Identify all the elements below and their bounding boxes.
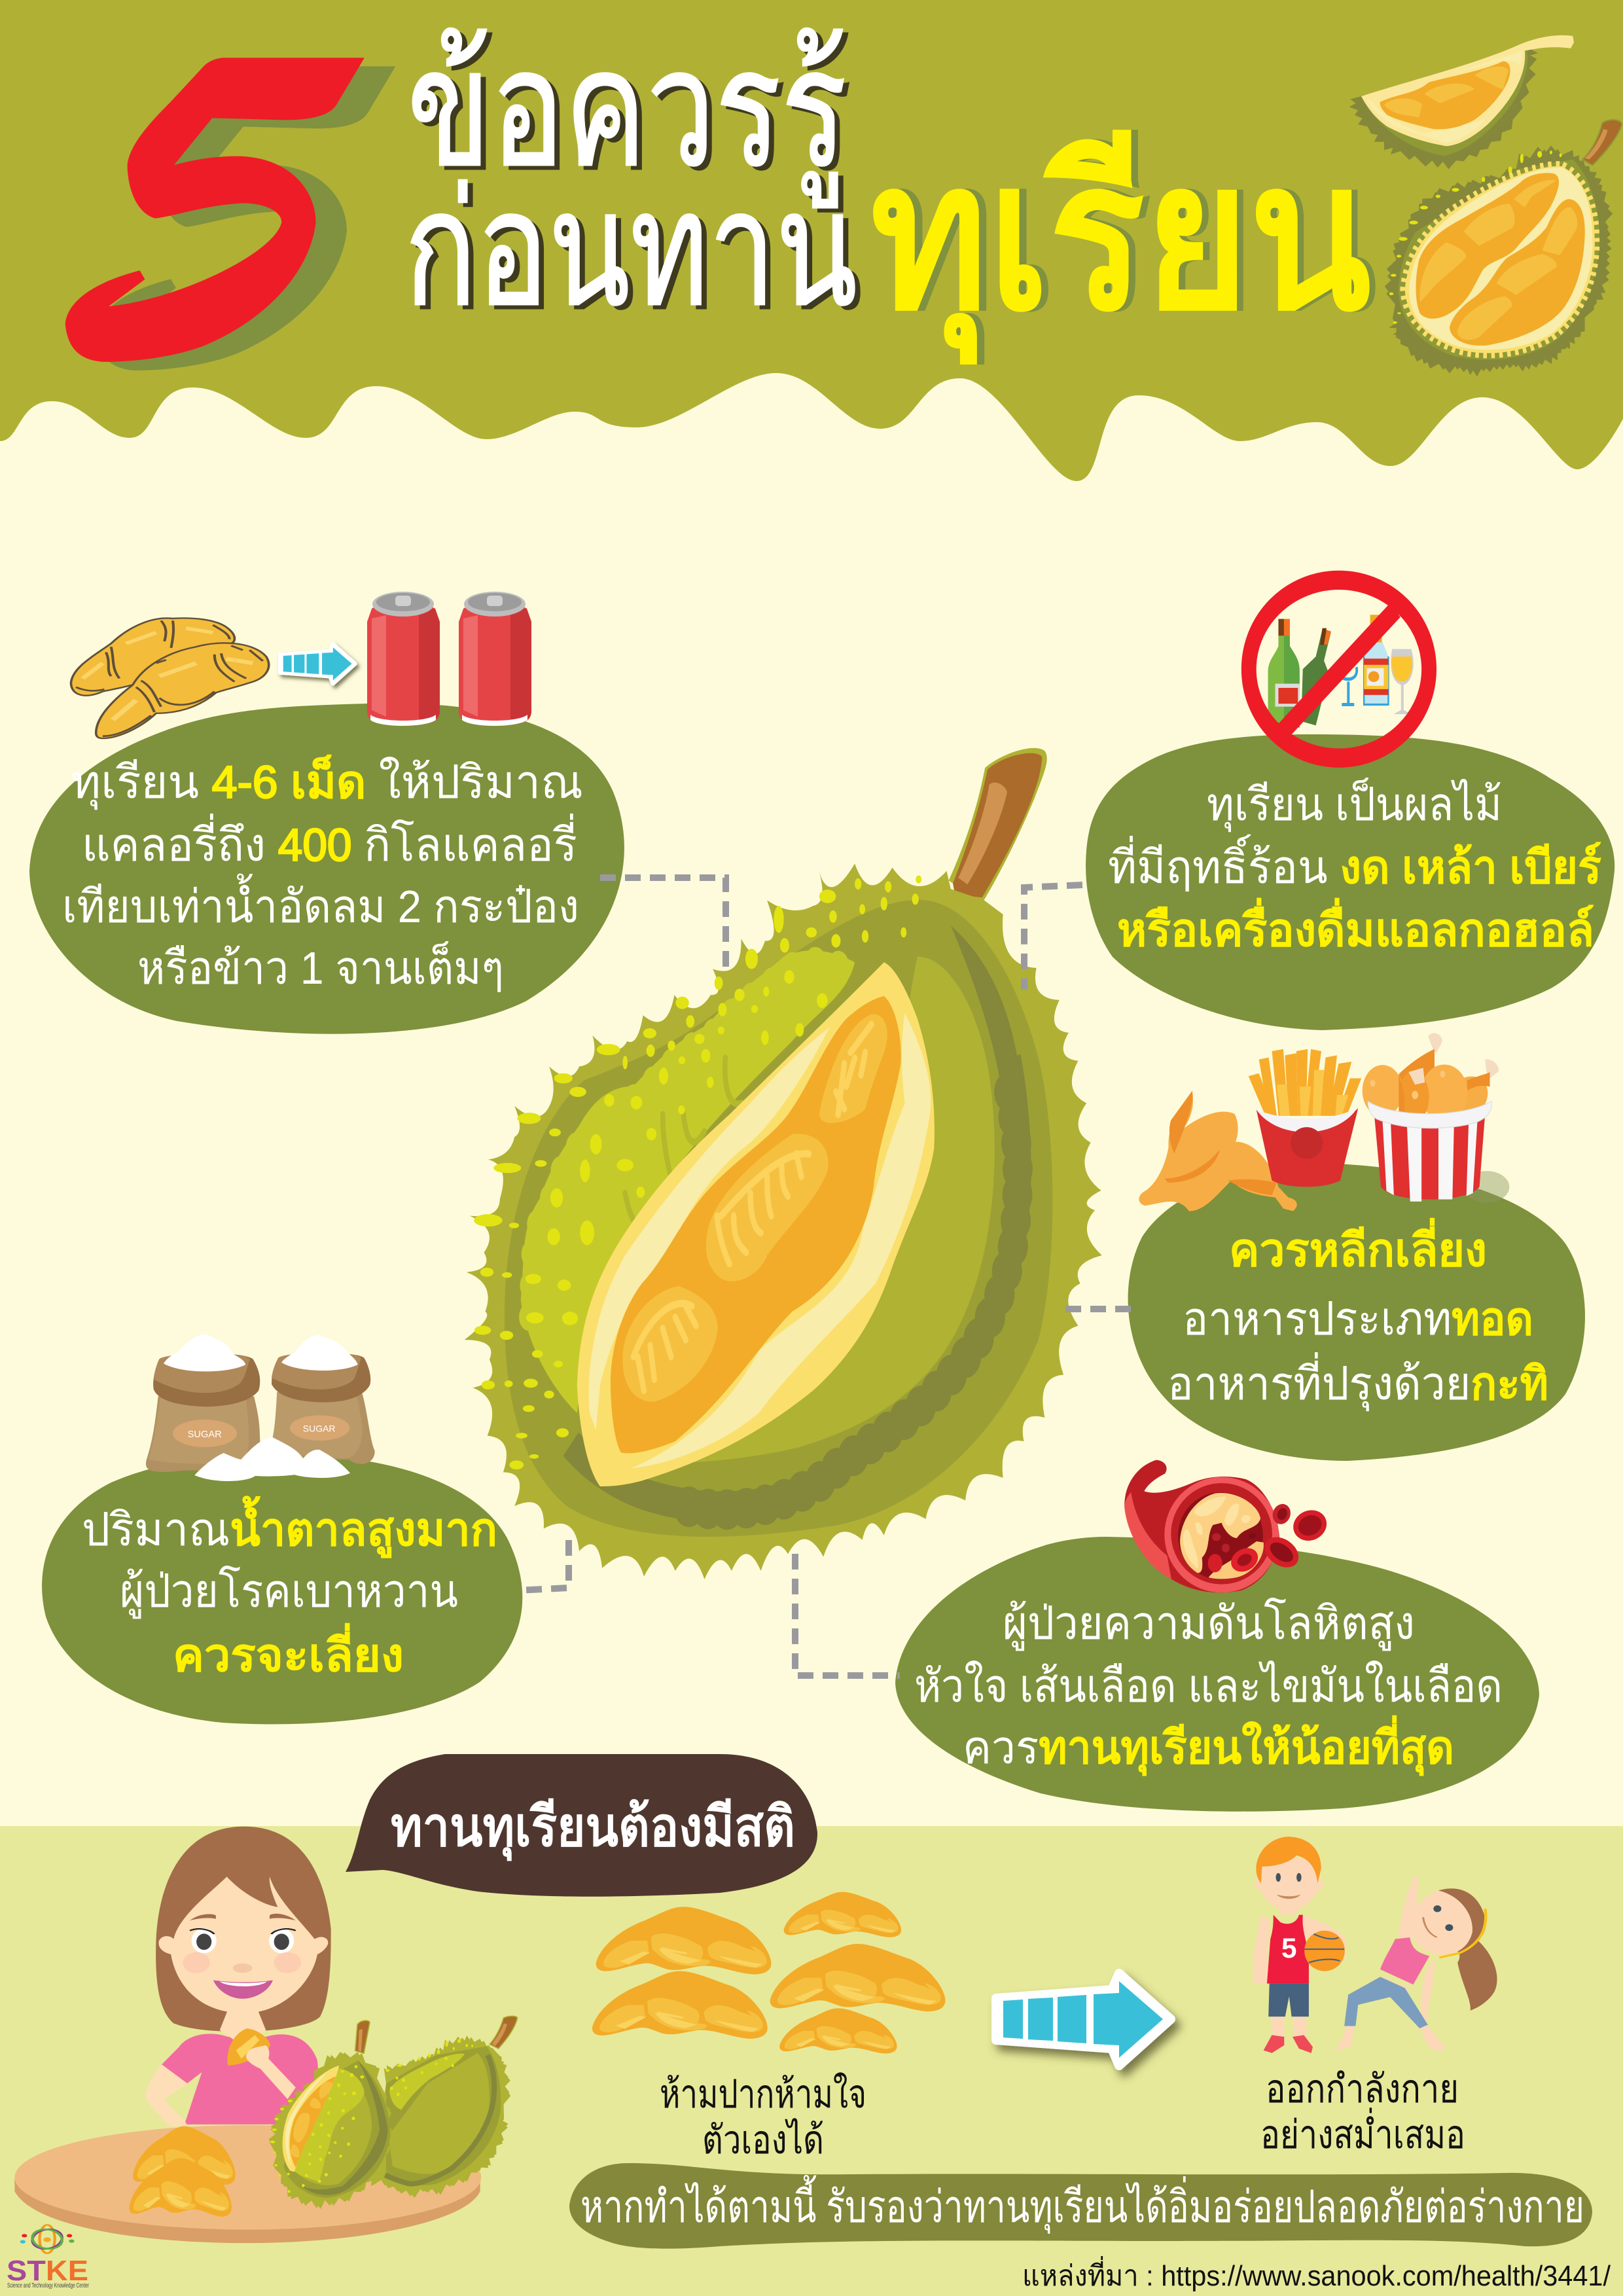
icon: small arrow (280, 644, 355, 684)
brows (190, 1914, 296, 1920)
piece 4 (770, 1944, 945, 2011)
speech bubble (346, 1754, 817, 1897)
arm left (145, 2064, 187, 2126)
sugar pile (194, 1437, 350, 1481)
sack right (272, 1335, 375, 1464)
sack left label: SUGAR (188, 1429, 222, 1440)
speech text: ทานทุเรียนต้องมีสติ (391, 1796, 795, 1861)
panel: avoid fried bubble (1128, 1164, 1585, 1461)
caption: restrain yourself: ตัวเองได้ (702, 2117, 824, 2162)
panel: blood pressure bubble (895, 1537, 1539, 1812)
title line 1: ข้อควรรู้ (407, 17, 847, 208)
sugar text: ผู้ป่วยโรคเบาหวาน (120, 1565, 458, 1619)
header banner with dripping edge (0, 0, 1623, 481)
fries (1249, 1049, 1361, 1116)
main durian illustration (465, 748, 1102, 1579)
shirt (162, 2034, 323, 2125)
yellow speckles (474, 876, 921, 1469)
piece 3 (784, 1892, 901, 1937)
piece 2 (592, 1971, 768, 2039)
sugar text: ควรจะเลี่ยง (173, 1624, 404, 1681)
caption: exercise regularly: อย่างสม่ำเสมอ (1260, 2108, 1465, 2157)
caption: restrain yourself: ห้ามปากห้ามใจ (660, 2072, 866, 2116)
durian pieces on table (129, 2126, 236, 2217)
table (14, 2178, 480, 2243)
blood pressure text: หัวใจ เส้นเลือด และไขมันในเลือด (914, 1660, 1503, 1712)
sack left (146, 1334, 260, 1472)
blood pressure text: ผู้ป่วยความดันโลหิตสูง (1003, 1597, 1415, 1651)
title line 2: ก่อนทาน (410, 163, 863, 342)
arrow to exercise (996, 1973, 1171, 2066)
fried text: อาหารที่ปรุงด้วยกะทิ (1168, 1352, 1548, 1412)
flesh orange core (611, 996, 901, 1453)
logo atom mark (20, 2225, 75, 2253)
girl exercising (1334, 1875, 1497, 2051)
fried wing (1139, 1091, 1297, 1211)
alcohol text: ที่มีฤทธิ์ร้อน งด เหล้า เบียร์ (1108, 834, 1601, 893)
chicken bucket (1374, 1116, 1485, 1200)
title durian word: ทุเรียน (870, 121, 1372, 366)
icon: soda can 2 (459, 592, 531, 726)
piece 5 (779, 2008, 897, 2054)
panel: sugar bubble (42, 1454, 522, 1724)
caption: restrain yourself (660, 2072, 866, 2162)
spiky rind (465, 864, 1102, 1579)
illustration: girl at table (14, 1827, 481, 2243)
icon: sugar sacks (146, 1334, 375, 1481)
title line 2: ก่อนทาน (404, 159, 857, 338)
icon: header durian half (1380, 120, 1622, 384)
fried text (1168, 1219, 1548, 1412)
sack right label: SUGAR (303, 1423, 336, 1433)
title durian word: ทุเรียน (878, 121, 1378, 366)
panel: calories bubble (29, 703, 624, 1034)
icon: blood vessel (1124, 1460, 1332, 1592)
icon: durian seeds (71, 618, 269, 738)
connector lines (517, 878, 1132, 1676)
flesh outer rim (577, 962, 935, 1486)
caption: exercise regularly (1260, 2067, 1465, 2157)
alcohol text: หรือเครื่องดื่มแอลกอฮอล์ (1117, 899, 1594, 956)
hair (156, 1827, 331, 2032)
logo wordmark: STKE (7, 2255, 88, 2287)
ears and face (158, 1876, 328, 2013)
alcohol text (1108, 778, 1601, 956)
calories text: เทียบเท่าน้ำอัดลม 2 กระป๋อง (62, 873, 579, 932)
sugar text (82, 1496, 497, 1681)
flesh fibres (633, 1024, 872, 1391)
bottom panel (0, 1826, 1623, 2296)
hand with durian (227, 2028, 296, 2099)
boy: 5 (1281, 1933, 1297, 1964)
light bumpy top-left rind (521, 950, 855, 1413)
conclusion banner (569, 2163, 1592, 2249)
fried text: ควรหลีกเลี่ยง (1229, 1219, 1487, 1276)
calories text: ทุเรียน 4-6 เม็ด ให้ปริมาณ (71, 755, 583, 810)
flesh seeds (623, 1014, 887, 1402)
icon: header durian slice (1349, 35, 1574, 170)
fried text: อาหารประเภททอด (1183, 1293, 1533, 1344)
sugar text: ปริมาณน้ำตาลสูงมาก (82, 1496, 497, 1558)
STKE logo (7, 2225, 89, 2289)
durian pieces pile (592, 1892, 945, 2054)
header big number 5 (65, 58, 395, 370)
illustration: exercising children (1253, 1837, 1497, 2053)
darker inner rind (505, 900, 1052, 1537)
icon: no alcohol sign (1249, 580, 1429, 758)
cut durian front (266, 2020, 397, 2212)
alcohol text: ทุเรียน เป็นผลไม้ (1207, 778, 1502, 833)
logo tagline: Science and Technology Knowledge Center (7, 2282, 89, 2289)
fries box (1257, 1108, 1358, 1187)
bucket shadow (1464, 1171, 1509, 1203)
calories text: แคลอรี่ถึง 400 กิโลแคลอรี่ (82, 814, 577, 870)
neck (220, 2010, 266, 2047)
title line 1: ข้อควรรู้ (412, 21, 852, 212)
caption: exercise regularly: ออกกำลังกาย (1266, 2067, 1459, 2111)
flesh pale layer (589, 1013, 931, 1468)
calories text: หรือข้าว 1 จานเต็มๆ (137, 941, 504, 994)
cheeks nose mouth (183, 1952, 301, 1999)
blood pressure text: ควรทานทุเรียนให้น้อยที่สุด (963, 1716, 1454, 1776)
boy (1253, 1837, 1346, 2053)
whole durian back (366, 2016, 518, 2202)
icon: fried chicken and fries (1139, 1033, 1509, 1211)
panel: no alcohol bubble (1086, 734, 1614, 1030)
stem (949, 748, 1047, 903)
chicken pieces (1363, 1033, 1499, 1131)
piece 1 (596, 1907, 772, 1975)
blood pressure text (914, 1597, 1503, 1776)
icon: soda can 1 (367, 592, 440, 726)
calories text (62, 755, 583, 994)
eyes (190, 1928, 296, 1953)
lighter body area (625, 957, 995, 1464)
dark band crescent (571, 925, 1020, 1509)
